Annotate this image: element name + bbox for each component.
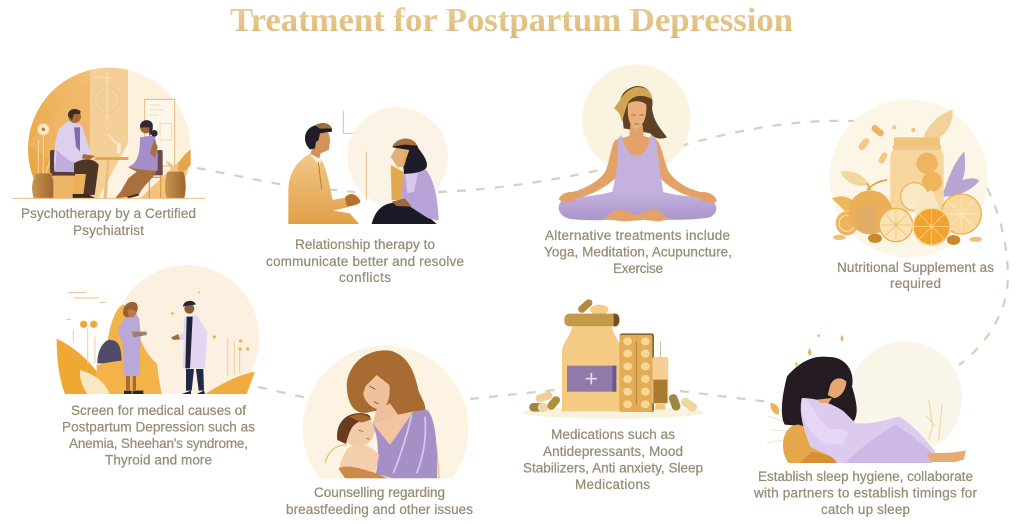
- caption: [544, 228, 732, 276]
- panel: nutritional supplement: [830, 99, 994, 291]
- caption: Counselling regarding: [314, 485, 445, 500]
- caption: Thyroid and more: [105, 452, 212, 468]
- caption: catch up sleep: [821, 502, 910, 517]
- caption: Nutritional Supplement as: [837, 260, 994, 275]
- panel: breastfeeding counselling: [286, 346, 473, 517]
- illustration: woman meditating: [559, 64, 717, 221]
- illustration: supplement jar with citrus fruit: [830, 99, 988, 257]
- caption: Antidepressants, Mood: [543, 444, 683, 459]
- panel: sleep hygiene: [753, 334, 978, 517]
- caption: [837, 260, 994, 291]
- caption: Psychiatrist: [73, 223, 144, 238]
- illustration: woman resting against pillow: [767, 334, 966, 463]
- caption: breastfeeding and other issues: [286, 502, 473, 517]
- panel: medical screening: [57, 265, 259, 468]
- caption: conflicts: [339, 270, 391, 285]
- caption: required: [890, 276, 941, 291]
- illustration: mother holding baby: [302, 346, 469, 478]
- caption: Psychotherapy by a Certified: [21, 206, 196, 221]
- caption: Exercise: [613, 261, 663, 276]
- panel: relationship therapy: [266, 107, 464, 285]
- illustration: patient and doctor standing: [56, 265, 260, 394]
- caption: Screen for medical causes of: [71, 403, 246, 418]
- caption: Medications such as: [551, 427, 675, 442]
- caption: [286, 485, 473, 517]
- illustration: doctor and patient in consulting room: [12, 67, 205, 200]
- dashed connector path: [197, 121, 1008, 402]
- caption: Alternative treatments include: [545, 228, 730, 243]
- caption: Medications: [575, 477, 650, 492]
- caption: Postpartum Depression such as: [62, 420, 255, 434]
- caption: [21, 206, 196, 238]
- panel: alternative treatments: [544, 64, 732, 276]
- illustration: medicine bottle, blister pack and syringe: [522, 298, 704, 419]
- caption: Stabilizers, Anti anxiety, Sleep: [523, 460, 703, 476]
- caption: Yoga, Meditation, Acupuncture,: [544, 244, 732, 260]
- caption: Establish sleep hygiene, collaborate: [758, 469, 973, 484]
- caption: [62, 403, 255, 468]
- caption: Anemia, Sheehan's syndrome,: [69, 436, 248, 451]
- panel: psychotherapy: [12, 67, 205, 238]
- caption: [753, 469, 978, 517]
- caption: Relationship therapy to: [295, 237, 435, 252]
- caption: [523, 427, 703, 492]
- panel: medications: [522, 298, 704, 492]
- caption: communicate better and resolve: [266, 254, 464, 269]
- caption: [266, 237, 464, 285]
- title: Treatment for Postpartum Depression: [230, 2, 793, 39]
- caption: with partners to establish timings for: [753, 486, 978, 500]
- illustration: couple talking: [288, 107, 448, 224]
